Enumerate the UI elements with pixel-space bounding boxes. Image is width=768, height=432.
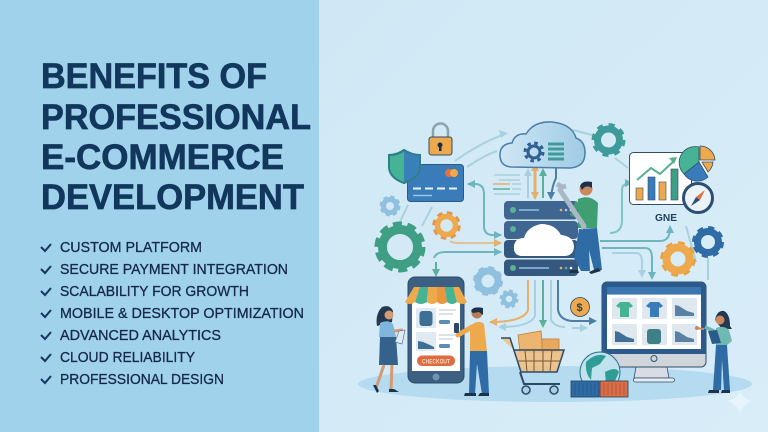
product: backpack bbox=[416, 308, 436, 328]
product grid bbox=[612, 298, 697, 345]
person: woman presenting bbox=[695, 311, 732, 393]
desktop monitor bbox=[602, 282, 706, 382]
icon: light gears centre bbox=[475, 268, 517, 307]
icon: light blue gear left bbox=[381, 197, 399, 215]
arrow heads bbox=[432, 130, 674, 332]
analytics card bbox=[630, 152, 692, 204]
list labels: CLOUD RELIABILITY bbox=[60, 349, 195, 366]
boxes bbox=[518, 331, 559, 352]
icon: orange gear left bbox=[434, 213, 459, 238]
icon: orange gear right bbox=[662, 244, 694, 274]
shopping cart bbox=[501, 331, 564, 394]
compass icon bbox=[684, 184, 712, 212]
icon: big teal gear bbox=[377, 224, 423, 270]
ground ellipse bbox=[358, 366, 752, 402]
benefits list bbox=[41, 239, 304, 388]
list labels: ADVANCED ANALYTICS bbox=[60, 327, 221, 344]
icon: dollar coin: $ bbox=[576, 302, 583, 314]
trend arrow bbox=[637, 160, 675, 180]
icon: credit card bbox=[408, 164, 464, 202]
title: E-COMMERCE bbox=[41, 138, 284, 177]
shop awning bbox=[405, 287, 467, 304]
icon: cloud bbox=[500, 122, 585, 168]
title: DEVELOPMENT bbox=[41, 178, 304, 217]
icon: sparkle bbox=[727, 390, 753, 414]
bar chart bbox=[636, 169, 678, 200]
list labels: MOBILE & DESKTOP OPTIMIZATION bbox=[60, 305, 304, 322]
icon: dollar coin bbox=[570, 298, 590, 316]
server cloud bbox=[514, 224, 574, 256]
shipping containers bbox=[571, 381, 628, 397]
icon: cloud gear bbox=[525, 143, 543, 161]
list labels: CUSTOM PLATFORM bbox=[60, 239, 202, 256]
icon: blue gear right bbox=[694, 228, 722, 256]
list labels: SCALABILITY FOR GROWTH bbox=[60, 283, 249, 300]
product: shoe bbox=[416, 332, 436, 351]
icon: shield bbox=[389, 150, 420, 183]
decorative data lines bbox=[493, 175, 521, 194]
connector arrows bbox=[400, 130, 708, 328]
globe bbox=[580, 352, 620, 392]
icon: teal gear top bbox=[594, 125, 624, 155]
title: BENEFITS OF bbox=[41, 57, 267, 96]
person: woman with tablet bbox=[373, 306, 405, 393]
list labels: SECURE PAYMENT INTEGRATION bbox=[60, 261, 288, 278]
title bbox=[41, 57, 311, 217]
server rack bbox=[504, 201, 578, 276]
smartphone bbox=[405, 277, 467, 383]
title: PROFESSIONAL bbox=[41, 98, 311, 137]
checkout button: CHECKOUT bbox=[422, 358, 450, 366]
pie chart icon bbox=[679, 146, 715, 181]
check icons bbox=[41, 244, 51, 383]
list labels bbox=[60, 239, 304, 388]
person: man with phone bbox=[454, 307, 489, 396]
GNE label: GNE bbox=[655, 212, 677, 224]
icon: wrench bbox=[560, 190, 584, 226]
icon: padlock bbox=[429, 124, 452, 155]
list labels: PROFESSIONAL DESIGN bbox=[60, 371, 224, 388]
panel: left sidebar bbox=[0, 0, 319, 432]
right background bbox=[319, 0, 768, 432]
person: technician with wrench bbox=[557, 182, 602, 274]
